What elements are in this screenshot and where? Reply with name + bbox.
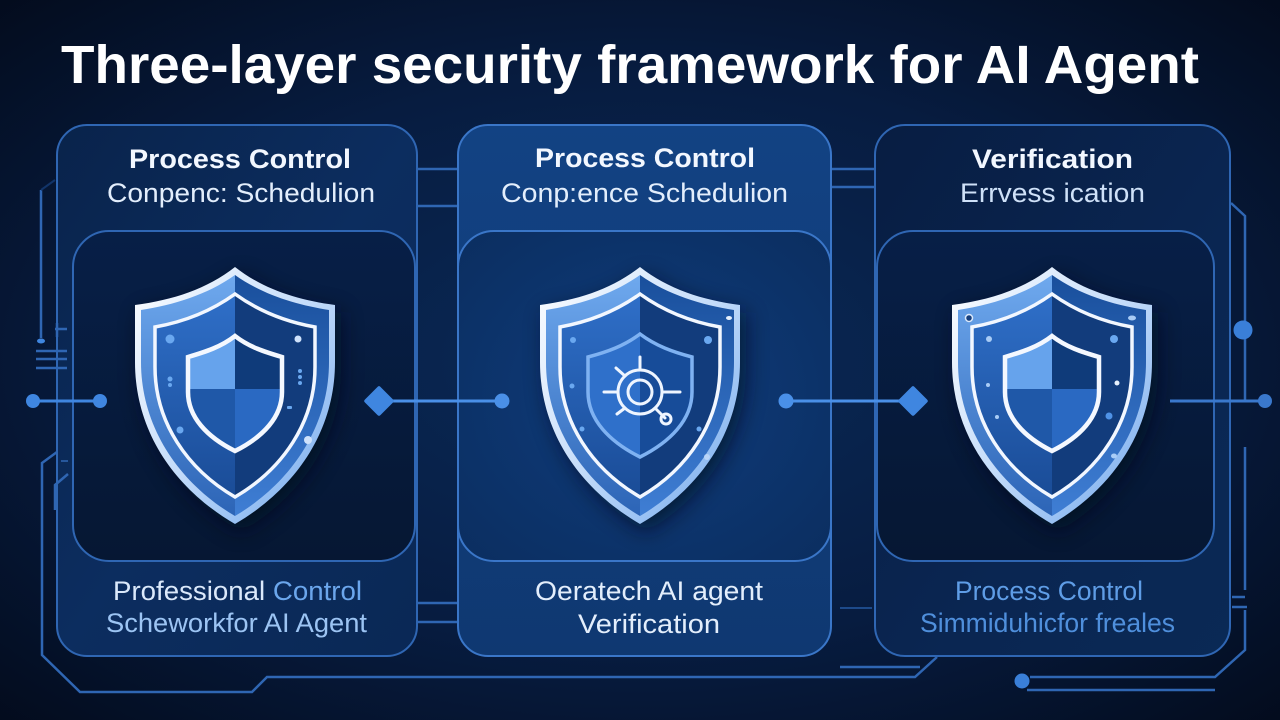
connector: diamond to middle panel xyxy=(363,385,510,417)
panel: right layer xyxy=(875,125,1230,656)
middle heading: Process Control xyxy=(535,143,755,173)
connector: left node link xyxy=(26,394,107,408)
panel: left layer xyxy=(57,125,417,656)
right heading: Verification xyxy=(972,144,1133,174)
title: Three-layer security framework for AI Agent xyxy=(61,35,1199,95)
icon: left shield xyxy=(135,267,341,532)
left subheading: Conpenc: Schedulion xyxy=(107,178,375,208)
circuit lines: left side xyxy=(37,180,937,692)
node: right upper xyxy=(1234,320,1252,340)
icon: right shield xyxy=(952,267,1158,532)
right caption: Process Control xyxy=(955,576,1143,606)
node: bottom right xyxy=(1014,674,1030,688)
left heading: Process Control xyxy=(129,144,351,174)
circuit lines: between panels xyxy=(417,169,920,667)
middle subheading: Conp:ence Schedulion xyxy=(501,178,788,208)
circuit details: left panel edge xyxy=(36,323,68,510)
right caption xyxy=(920,576,1175,638)
right caption: Simmiduhicfor freales xyxy=(920,608,1175,638)
icon: gear target xyxy=(604,357,680,424)
left caption: Scheworkfor AI Agent xyxy=(106,608,367,638)
middle caption: Verification xyxy=(578,609,720,639)
panel: middle layer xyxy=(458,125,831,656)
connector: right node link xyxy=(1170,394,1272,408)
right subheading: Errvess ication xyxy=(960,178,1145,208)
circuit lines: right side xyxy=(1027,203,1247,690)
left caption xyxy=(106,576,367,638)
left caption: Professional Control xyxy=(113,576,362,606)
middle caption: Oeratech AI agent xyxy=(535,576,764,606)
middle caption xyxy=(535,576,764,639)
connector: middle panel to diamond xyxy=(778,385,929,417)
icon: middle shield with gear xyxy=(540,267,746,532)
